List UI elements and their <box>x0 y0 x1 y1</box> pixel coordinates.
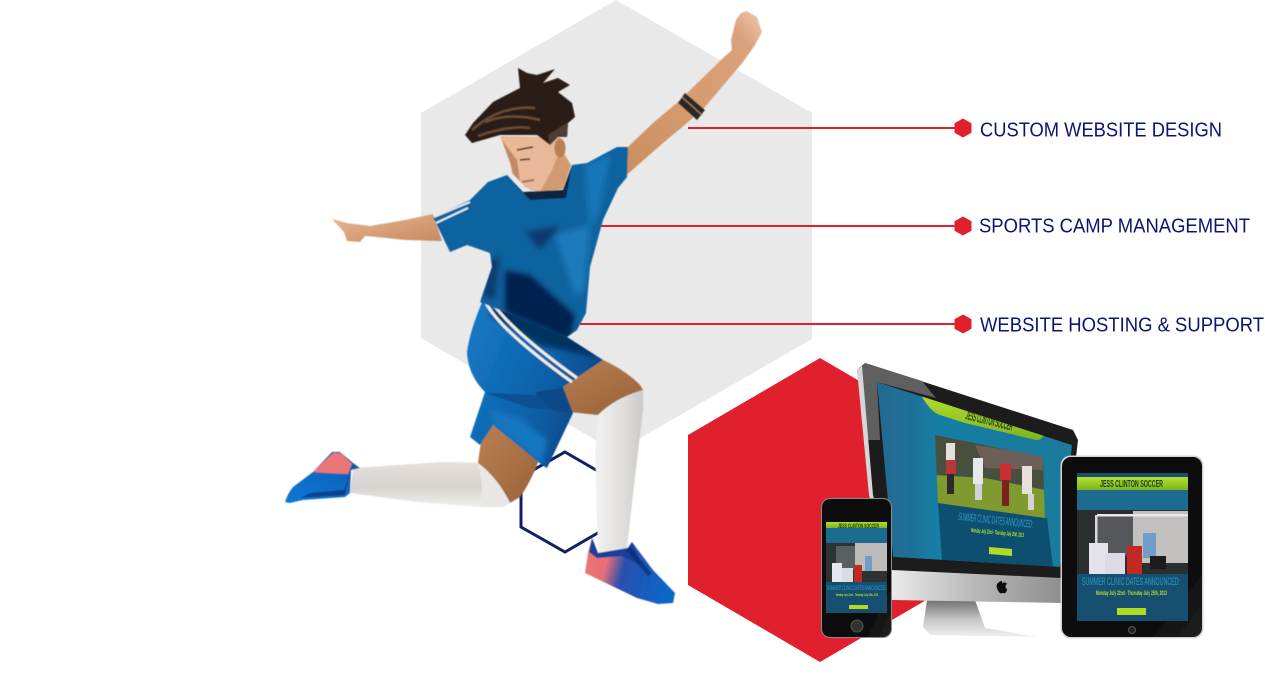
tablet button <box>1117 608 1146 615</box>
mouth <box>522 180 534 182</box>
button <box>989 547 1012 556</box>
red hexagon <box>688 358 952 662</box>
left arm <box>332 214 442 242</box>
shirt <box>433 147 628 340</box>
back foot boot <box>285 452 360 503</box>
monitor screen: JESS CLINTON SOCCER <box>964 408 1014 434</box>
ear <box>554 138 566 158</box>
icon: red hexagon bullet <box>954 314 972 334</box>
phone title: JESS CLINTON SOCCER <box>838 523 879 530</box>
hero photo <box>935 435 1045 518</box>
apple logo <box>997 581 1007 593</box>
monitor <box>857 363 1078 603</box>
service item: sports camp management <box>954 214 1250 238</box>
tablet photo <box>1077 510 1188 574</box>
monitor bezel glare <box>861 363 936 440</box>
back leg sock <box>350 462 510 507</box>
shorts stripes <box>486 302 577 382</box>
front leg sock <box>595 390 643 553</box>
hair <box>465 68 575 145</box>
silver monitor edge <box>857 366 892 570</box>
phone <box>821 498 892 638</box>
phone: SUMMER CLINIC DATES ANNOUNCED: <box>827 585 886 592</box>
icon: red hexagon bullet <box>954 118 972 138</box>
tablet green header <box>1077 477 1188 490</box>
monitor stand <box>923 600 1037 637</box>
tablet home button <box>1128 626 1136 634</box>
monitor screen: Monday July 22nd - Thursday July 25th, 2013 <box>971 528 1024 539</box>
phone photo <box>826 543 887 582</box>
service item: website hosting and support <box>954 314 1264 336</box>
sleeve stripes <box>434 202 470 223</box>
tablet dates: Monday July 22nd - Thursday July 25th, 2013 <box>1096 591 1167 597</box>
monitor chin <box>888 565 1062 603</box>
phone home button <box>851 620 863 632</box>
front leg thigh <box>537 360 643 415</box>
tablet title: JESS CLINTON SOCCER <box>1100 478 1163 490</box>
icon: red hexagon bullet <box>954 216 972 236</box>
eye and brow <box>517 147 533 160</box>
phone nav <box>826 528 887 543</box>
back leg thigh <box>478 423 540 503</box>
collar <box>505 164 572 200</box>
front foot boot <box>585 538 675 604</box>
device mockups <box>821 363 1204 638</box>
infographic canvas <box>284 0 1264 662</box>
neck and face <box>500 136 571 193</box>
dark content panel <box>938 503 1053 567</box>
monitor screen <box>877 382 1072 567</box>
green banner <box>922 396 1044 440</box>
grey background hexagon <box>421 0 812 452</box>
photo players <box>946 443 955 460</box>
tablet nav <box>1077 490 1188 510</box>
monitor body <box>857 363 1078 578</box>
shorts <box>467 300 603 468</box>
phone button <box>849 605 868 609</box>
dark folds <box>505 270 575 340</box>
phone green header <box>826 522 887 528</box>
connector lines <box>580 128 960 324</box>
tablet <box>1060 456 1204 638</box>
right arm <box>623 11 762 178</box>
navy outline hexagon <box>521 452 608 552</box>
phone screen <box>826 522 887 613</box>
phone dates: Monday July 22nd - Thursday July 25th, 2013 <box>836 593 878 597</box>
soccer player jumping <box>285 11 762 604</box>
service item: custom website design <box>954 118 1222 142</box>
label: CUSTOM WEBSITE DESIGN <box>980 118 1222 142</box>
armband <box>678 93 705 120</box>
tablet screen <box>1077 473 1188 621</box>
monitor screen: SUMMER CLINIC DATES ANNOUNCED: <box>958 511 1034 531</box>
